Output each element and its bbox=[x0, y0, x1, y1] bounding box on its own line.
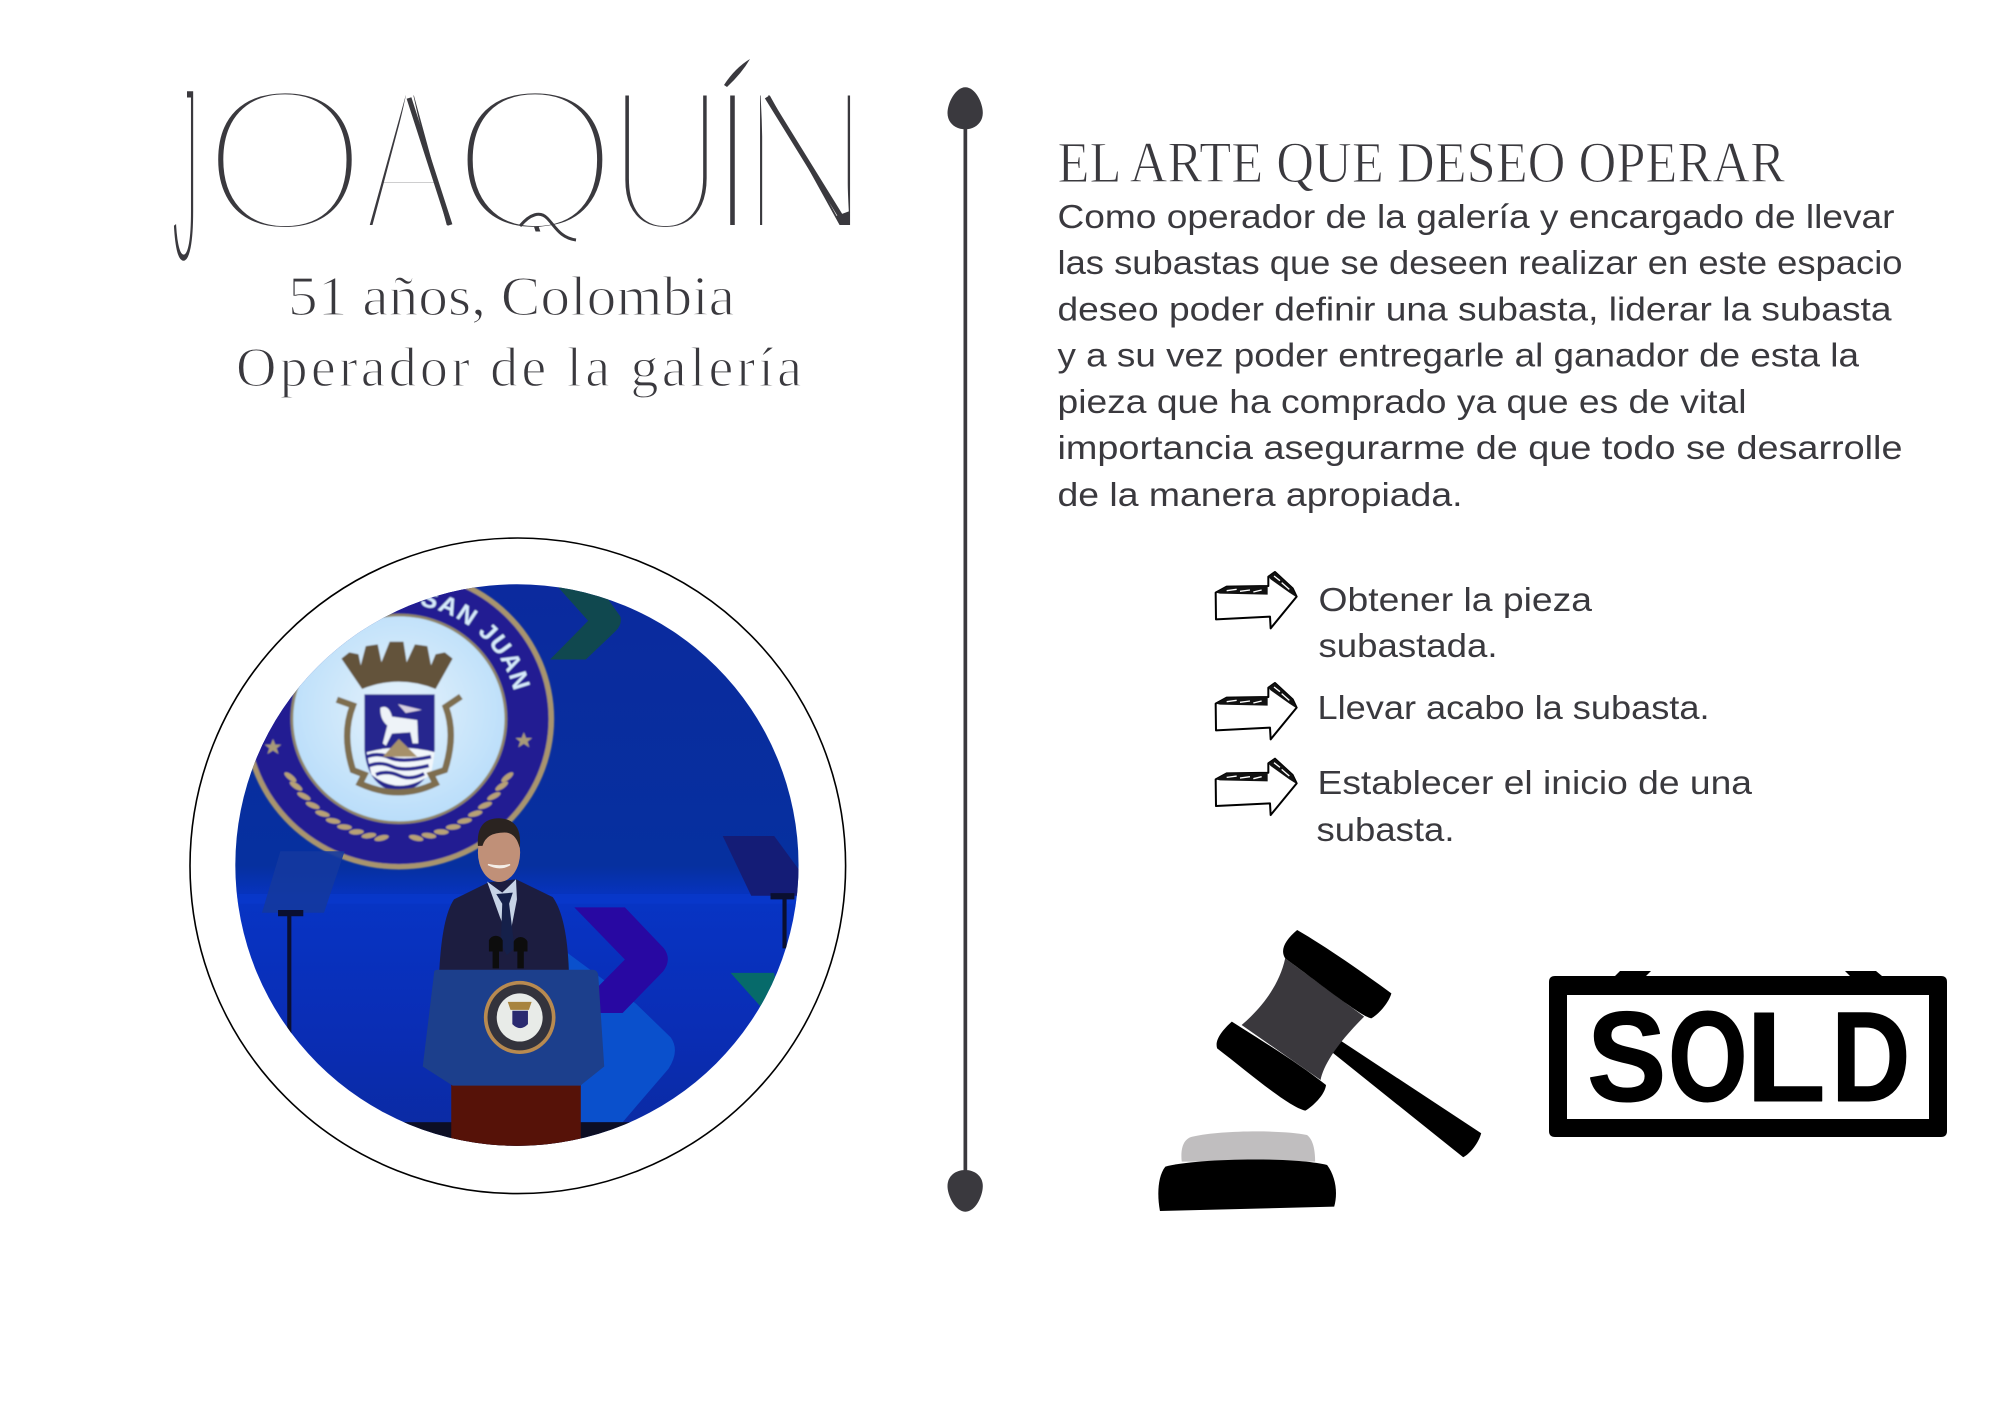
arrow icon 2 bbox=[1216, 683, 1297, 739]
floor bbox=[404, 1122, 630, 1146]
gavel barrel bbox=[1242, 958, 1364, 1080]
shield bbox=[364, 694, 435, 792]
body paragraph: y a su vez poder entregarle al ganador de esta la bbox=[1058, 338, 1859, 375]
arrow icon 3 bbox=[1216, 759, 1297, 815]
podium seal bbox=[484, 981, 556, 1054]
list item 3: Establecer el inicio de una bbox=[1318, 765, 1752, 802]
vertical timeline divider bbox=[948, 87, 983, 1212]
title: JOAQUÍN: A bbox=[362, 43, 457, 278]
sold lettering: S bbox=[1587, 986, 1666, 1129]
body paragraph: Como operador de la galería y encargado de llevar bbox=[1058, 199, 1894, 236]
stage band bbox=[232, 894, 802, 904]
arrow icon 1 bbox=[1216, 572, 1297, 628]
list item 2: Llevar acabo la subasta. bbox=[1318, 690, 1710, 727]
light blue chevron bbox=[568, 954, 675, 1122]
city seal bbox=[252, 587, 556, 870]
photo bbox=[235, 584, 799, 1146]
bottom drop bbox=[948, 1170, 983, 1212]
list item 3: subasta. bbox=[1316, 812, 1454, 849]
sign frame bbox=[1549, 971, 1947, 1137]
sold lettering: L bbox=[1746, 986, 1826, 1129]
sold lettering: D bbox=[1831, 986, 1910, 1129]
icon: gavel bbox=[1158, 930, 1481, 1211]
green chevron top bbox=[550, 587, 621, 660]
green chevron bottom bbox=[731, 973, 776, 1006]
right teleprompter bbox=[723, 836, 799, 896]
title: JOAQUÍN: N bbox=[738, 42, 872, 277]
body paragraph: las subastas que se deseen realizar en este espacio bbox=[1058, 245, 1902, 282]
sound block base bbox=[1158, 1159, 1336, 1211]
profile photo in ring bbox=[189, 537, 846, 1194]
sound block top bbox=[1181, 1131, 1315, 1162]
body paragraph bbox=[1058, 199, 1902, 514]
subtitle: age and country: 51 años, Colombia bbox=[288, 266, 735, 328]
lamb bbox=[380, 707, 418, 746]
body paragraph: pieza que ha comprado ya que es de vital bbox=[1058, 384, 1746, 421]
crown bbox=[341, 642, 453, 689]
title: JOAQUÍN bbox=[171, 28, 872, 322]
list item 1: Obtener la pieza bbox=[1318, 582, 1592, 619]
sold lettering: O bbox=[1668, 985, 1748, 1129]
icon: sold sign bbox=[1549, 971, 1947, 1137]
purple chevron bbox=[572, 907, 668, 1013]
body paragraph: deseo poder definir una subasta, liderar la subasta bbox=[1058, 291, 1892, 328]
gavel handle bbox=[1333, 1040, 1481, 1157]
list item 3 bbox=[1316, 765, 1752, 849]
title: JOAQUÍN: O bbox=[200, 43, 370, 278]
title: JOAQUÍN: U bbox=[607, 43, 725, 277]
title: JOAQUÍN: Q bbox=[449, 42, 621, 277]
laurel bbox=[283, 771, 515, 842]
top drop bbox=[948, 87, 983, 129]
subtitle: role: Operador de la galería bbox=[236, 337, 802, 399]
podium top bbox=[423, 970, 604, 1086]
gavel top head bbox=[1283, 930, 1391, 1018]
scrolls bbox=[337, 697, 461, 792]
body paragraph: de la manera apropiada. bbox=[1058, 477, 1462, 514]
outer ring bbox=[190, 538, 846, 1194]
title: JOAQUÍN: J bbox=[171, 28, 199, 322]
heading: EL ARTE QUE DESEO OPERAR bbox=[1058, 130, 1785, 195]
speaker bbox=[439, 818, 569, 971]
stars bbox=[265, 732, 532, 754]
gavel bottom head bbox=[1217, 1022, 1326, 1111]
list item 1: subastada. bbox=[1318, 628, 1498, 665]
body paragraph: importancia asegurarme de que todo se desarrolle bbox=[1058, 430, 1902, 467]
left teleprompter bbox=[262, 851, 345, 913]
seal lettering: SAN JUAN bbox=[420, 596, 532, 691]
list item 1 bbox=[1318, 582, 1592, 665]
title: JOAQUÍN: Í bbox=[703, 42, 762, 278]
sold lettering bbox=[1587, 985, 1910, 1129]
podium base bbox=[451, 1084, 581, 1149]
